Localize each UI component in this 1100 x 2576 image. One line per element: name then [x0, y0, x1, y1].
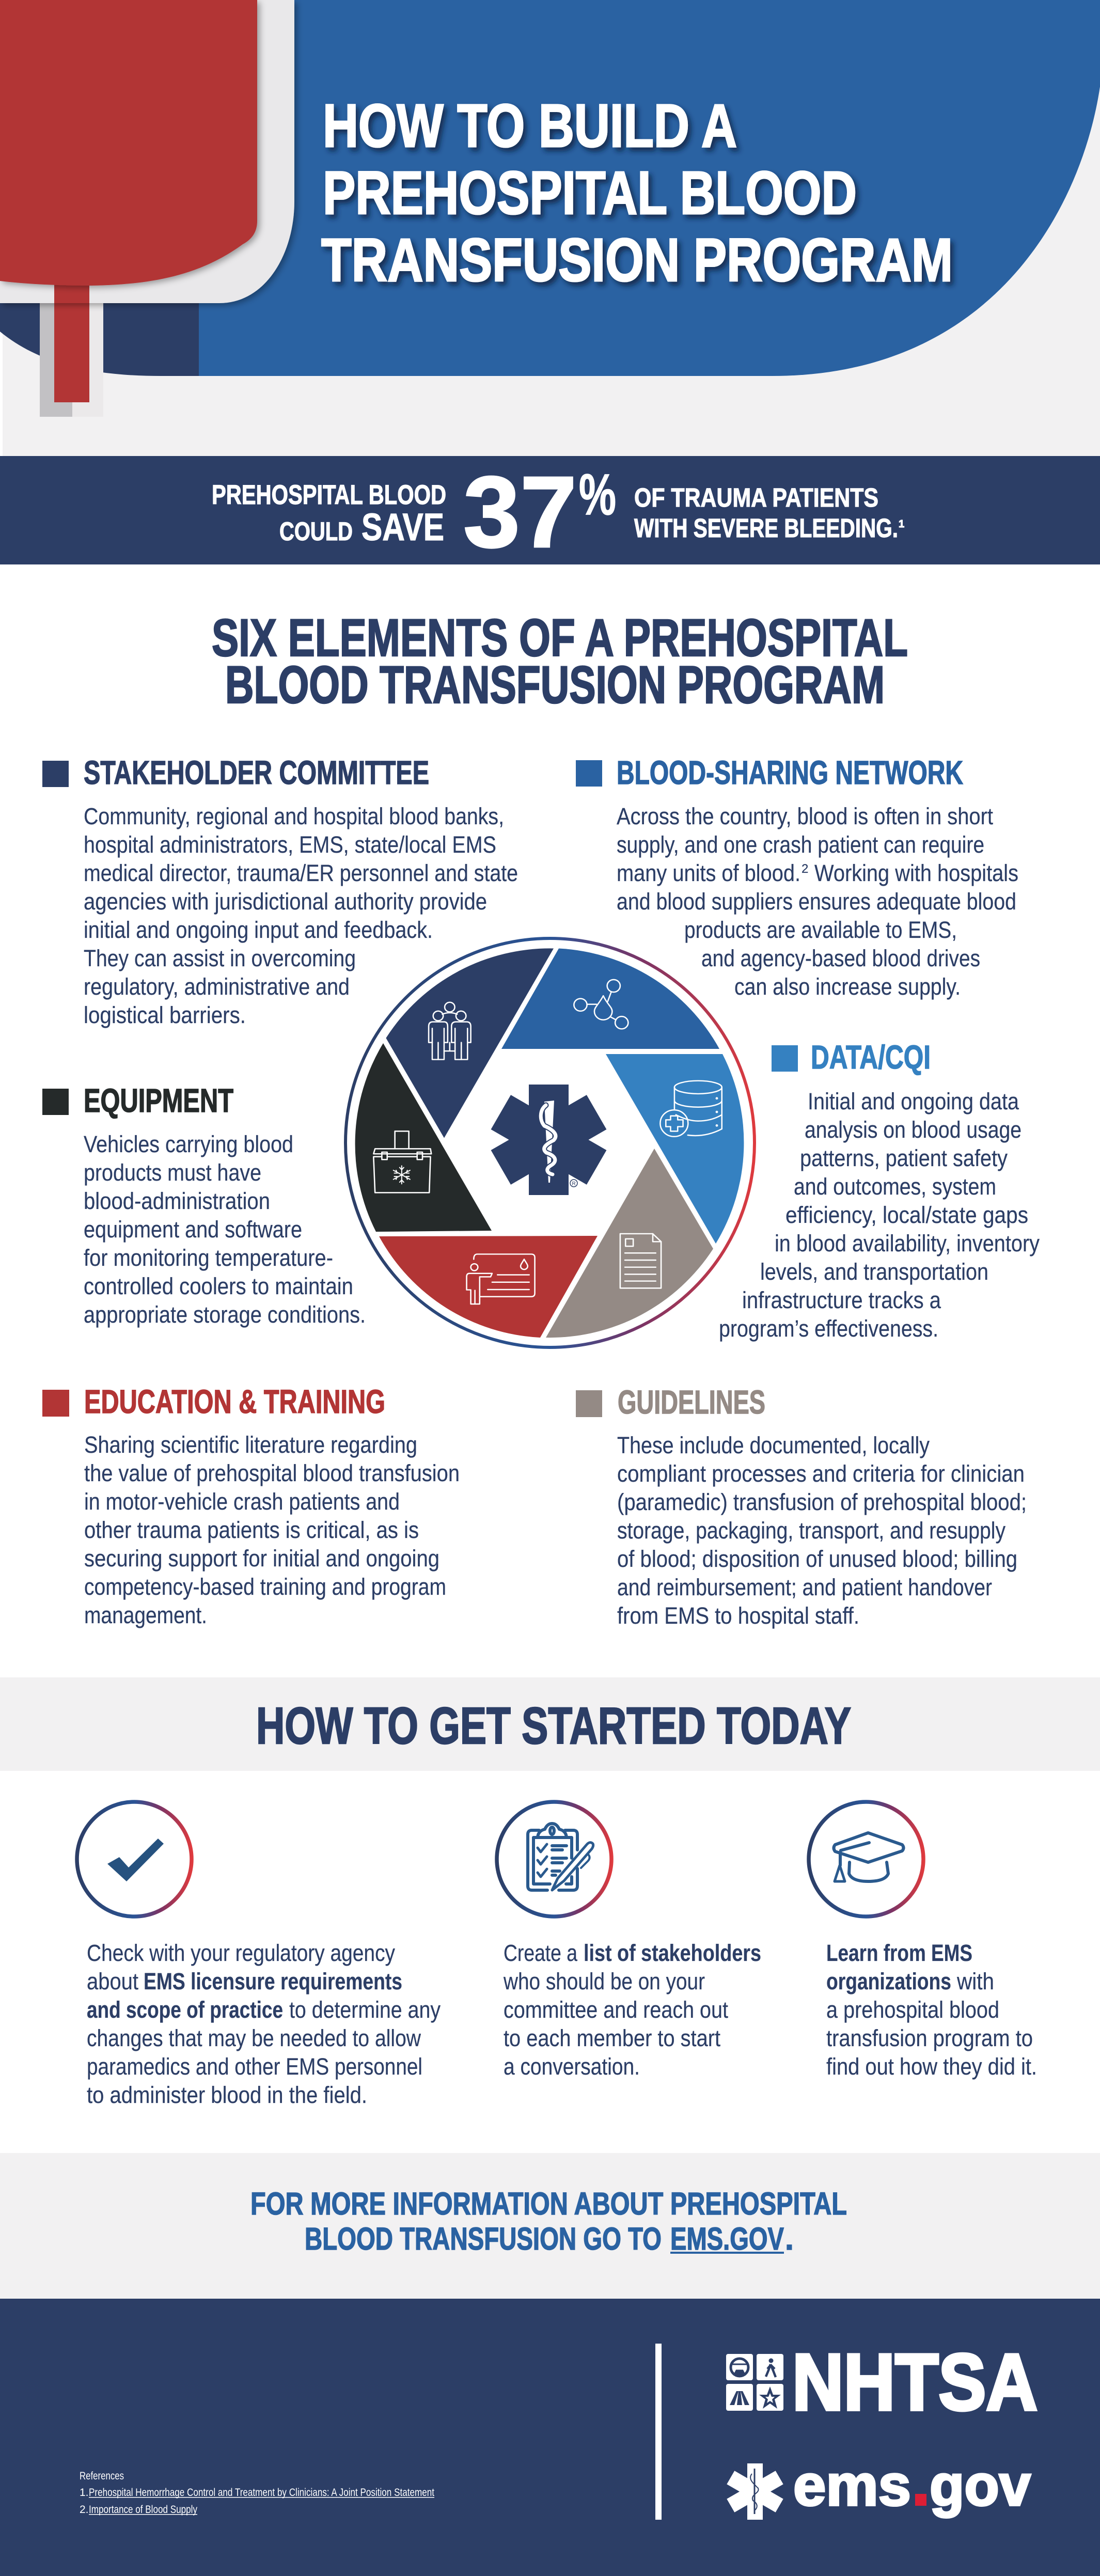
text: education body: management. [84, 1602, 207, 1628]
text: blood-sharing body: many units of blood. [617, 860, 800, 886]
call to action [250, 2186, 847, 2256]
text: equipment body: appropriate storage conditions. [84, 1301, 366, 1328]
text: data body: Initial and ongoing data [808, 1088, 1019, 1114]
step 1: regulatory agency [77, 1802, 441, 2108]
step 2: stakeholders list [497, 1802, 761, 2080]
text: step 3: transfusion program to [826, 2025, 1033, 2051]
icon: clipboard circle [497, 1802, 611, 1917]
text: step 3 [826, 1940, 1037, 2080]
text: guidelines body: from EMS to hospital staff. [617, 1603, 859, 1629]
text: step 1: Check with your regulatory agency [87, 1940, 395, 1966]
panel: data/cqi [719, 1039, 1040, 1342]
stat text right: OF TRAUMA PATIENTS [634, 483, 878, 512]
text: guidelines body: and reimbursement; and patient handover [617, 1574, 992, 1600]
icon: blood bag [0, 0, 294, 303]
text: stakeholder body: initial and ongoing input and feedback. [84, 917, 433, 943]
text: equipment body: controlled coolers to maintain [84, 1273, 353, 1299]
text: equipment body: blood-administration [84, 1188, 270, 1214]
wordmark: gov: gov [930, 2453, 1031, 2518]
segment: blood-sharing [501, 948, 719, 1049]
text: equipment body: Vehicles carrying blood [84, 1131, 293, 1157]
swatch: education [42, 1390, 69, 1417]
red dot [915, 2494, 926, 2506]
text: education body: in motor-vehicle crash patients and [84, 1488, 400, 1515]
text: education body: securing support for initial and ongoing [84, 1545, 439, 1572]
icon: star of life [491, 1085, 606, 1195]
icon: presenter [467, 1254, 535, 1304]
icon: graduation cap circle [809, 1802, 923, 1917]
text: step 2 [503, 1940, 761, 2080]
icon: database [660, 1081, 722, 1137]
icon: white star of life [727, 2463, 783, 2520]
text: blood-sharing body: and agency-based blood drives [701, 945, 980, 971]
text: step 1: to determine any [289, 1997, 441, 2023]
text: step 2: list of stakeholders [584, 1940, 761, 1966]
text: blood-sharing body: Across the country, blood is often in short [617, 803, 993, 829]
text: blood-sharing body: supply, and one crash patient can require [617, 831, 984, 858]
text: step 2: a conversation. [504, 2053, 640, 2080]
text: data body: analysis on blood usage [805, 1117, 1022, 1143]
stat text left [212, 480, 446, 548]
icon: cooler [373, 1131, 431, 1192]
references [80, 2470, 434, 2516]
text: step 1: about [87, 1968, 138, 1994]
footer divider [655, 2344, 662, 2520]
chart: six element wheel [345, 938, 755, 1347]
references: Prehospital Hemorrhage Control and Treatment by Clinicians: A Joint Position Statement [89, 2487, 434, 2499]
text: stakeholder body [84, 803, 518, 1028]
panel: guidelines [576, 1384, 1027, 1629]
text: data body: in blood availability, inventory [775, 1230, 1040, 1256]
heading: guidelines: GUIDELINES [618, 1384, 765, 1421]
icon: check mark circle [77, 1802, 192, 1917]
text: step 1: EMS licensure requirements [144, 1968, 402, 1994]
text: step 1: paramedics and other EMS personnel [87, 2053, 422, 2080]
references: Importance of Blood Supply [89, 2504, 197, 2516]
text: step 3: with [956, 1968, 994, 1994]
stat number 37%: 37 [463, 455, 577, 569]
logo: ems.gov [727, 2453, 1031, 2520]
text: education body: competency-based training and program [84, 1574, 446, 1600]
panel: equipment [42, 1082, 366, 1328]
stat text right: 1 [899, 519, 904, 530]
blue hero shape [199, 0, 1100, 376]
text: step 1: to administer blood in the field. [87, 2082, 367, 2108]
text: blood-sharing body: and blood suppliers ensures adequate blood [617, 888, 1016, 915]
hero banner [0, 0, 1100, 417]
heading: data/cqi: DATA/CQI [811, 1039, 931, 1076]
text: step 1 [87, 1940, 441, 2108]
wordmark: ems: ems [793, 2453, 911, 2518]
icon: document [620, 1234, 661, 1288]
text: step 3: a prehospital blood [826, 1997, 999, 2023]
text: stakeholder body: Community, regional and hospital blood banks, [84, 803, 504, 829]
call to action: . [785, 2221, 794, 2256]
text: equipment body: products must have [84, 1159, 261, 1186]
text: guidelines body: storage, packaging, transport, and resupply [617, 1517, 1005, 1544]
icon: nhtsa tiles [726, 2354, 783, 2411]
segment: guidelines [546, 1149, 713, 1338]
text: blood-sharing body: can also increase supply. [734, 973, 961, 1000]
text: education body [84, 1432, 460, 1628]
stat text left: COULD [279, 517, 353, 546]
text: equipment body [84, 1131, 366, 1328]
heading: six elements: BLOOD TRANSFUSION PROGRAM [225, 655, 885, 714]
heading: stakeholder committee: STAKEHOLDER COMMITTEE [84, 754, 429, 791]
text: guidelines body [617, 1432, 1027, 1629]
heading: how to get started today: HOW TO GET STARTED TODAY [256, 1697, 851, 1755]
text: data body [719, 1088, 1040, 1342]
text: step 3: find out how they did it. [826, 2053, 1037, 2080]
wheel ring [345, 938, 755, 1347]
text: blood-sharing body: products are available to EMS, [684, 917, 957, 943]
references: References [80, 2470, 124, 2482]
swatch: equipment [42, 1089, 69, 1115]
text: stakeholder body: medical director, trauma/ER personnel and state [84, 860, 518, 886]
text: data body: levels, and transportation [760, 1259, 988, 1285]
stat band [0, 455, 1100, 569]
stat text right: WITH SEVERE BLEEDING. [634, 513, 898, 543]
references: 2. [80, 2504, 89, 2516]
text: stakeholder body: regulatory, administrative and [84, 973, 350, 1000]
heading: six elements: SIX ELEMENTS OF A PREHOSPITAL [212, 608, 908, 667]
stat text right [634, 483, 904, 543]
title [321, 92, 953, 294]
text: step 1: and scope of practice [87, 1997, 283, 2023]
text: data body: infrastructure tracks a [742, 1287, 941, 1313]
segment: data [606, 1054, 744, 1244]
footer [0, 2299, 1100, 2576]
text: equipment body: equipment and software [84, 1216, 302, 1243]
text: stakeholder body: hospital administrators, EMS, state/local EMS [84, 831, 496, 858]
swatch: guidelines [576, 1390, 602, 1417]
icons in wheel [373, 980, 722, 1304]
icon: star of life: R [572, 1181, 576, 1187]
call to action: EMS.GOV [670, 2221, 784, 2256]
navy hero swoosh [0, 289, 217, 376]
call to action: FOR MORE INFORMATION ABOUT PREHOSPITAL [250, 2186, 847, 2221]
title: PREHOSPITAL BLOOD [323, 159, 857, 227]
stat text left: PREHOSPITAL BLOOD [212, 480, 446, 510]
panel: blood-sharing network [576, 754, 1018, 1000]
icon: people [429, 1002, 471, 1060]
text: stakeholder body: agencies with jurisdictional authority provide [84, 888, 487, 915]
text: data body: patterns, patient safety [800, 1145, 1008, 1171]
text: guidelines body: of blood; disposition of unused blood; billing [617, 1546, 1017, 1572]
swatch: blood-sharing [576, 760, 602, 787]
text: data body: efficiency, local/state gaps [785, 1202, 1028, 1228]
segment: education [379, 1236, 598, 1338]
references: 1. [80, 2487, 89, 2499]
text: step 2: committee and reach out [504, 1997, 728, 2023]
stat number 37%: % [579, 462, 616, 527]
segment: equipment [355, 1043, 492, 1232]
text: step 1: changes that may be needed to allow [87, 2025, 421, 2051]
heading: six elements [212, 608, 908, 714]
icon: network drop [574, 980, 628, 1029]
call to action: BLOOD TRANSFUSION GO TO [305, 2221, 662, 2256]
panel: stakeholder committee [42, 754, 518, 1028]
text: stakeholder body: logistical barriers. [84, 1002, 246, 1028]
heading: blood-sharing network: BLOOD-SHARING NETWORK [617, 754, 963, 791]
step 3: learn from organizations [809, 1802, 1037, 2080]
text: step 2: to each member to start [504, 2025, 720, 2051]
text: education body: Sharing scientific literature regarding [84, 1432, 417, 1458]
text: blood-sharing body: 2 [802, 862, 808, 876]
stat text left: SAVE [362, 506, 444, 548]
text: blood-sharing body [617, 803, 1018, 1000]
title: HOW TO BUILD A [323, 92, 737, 160]
heading: equipment: EQUIPMENT [84, 1082, 233, 1119]
text: step 2: who should be on your [503, 1968, 705, 1994]
title: TRANSFUSION PROGRAM [321, 226, 953, 294]
text: guidelines body: compliant processes and criteria for clinician [617, 1460, 1025, 1487]
text: equipment body: for monitoring temperature- [84, 1245, 333, 1271]
swatch: data [772, 1045, 798, 1072]
icon: blood bag tube [40, 279, 103, 417]
heading: education & training: EDUCATION & TRAINING [84, 1383, 385, 1420]
logo: nhtsa [726, 2337, 1038, 2427]
text: guidelines body: These include documented, locally [617, 1432, 930, 1458]
text: data body: program’s effectiveness. [719, 1315, 938, 1342]
text: blood-sharing body: Working with hospitals [814, 860, 1018, 886]
segment: stakeholder [386, 948, 554, 1138]
text: guidelines body: (paramedic) transfusion of prehospital blood; [617, 1489, 1027, 1515]
text: stakeholder body: They can assist in overcoming [84, 945, 356, 971]
text: step 2: Create a [504, 1940, 578, 1966]
panel: education & training [42, 1383, 460, 1628]
wordmark: NHTSA: NHTSA [792, 2337, 1038, 2427]
swatch: stakeholder [42, 761, 69, 787]
text: education body: other trauma patients is critical, as is [84, 1517, 419, 1543]
text: data body: and outcomes, system [794, 1173, 996, 1200]
text: step 3: organizations [826, 1968, 951, 1994]
text: step 3: Learn from EMS [826, 1940, 972, 1966]
text: education body: the value of prehospital blood transfusion [84, 1460, 460, 1486]
